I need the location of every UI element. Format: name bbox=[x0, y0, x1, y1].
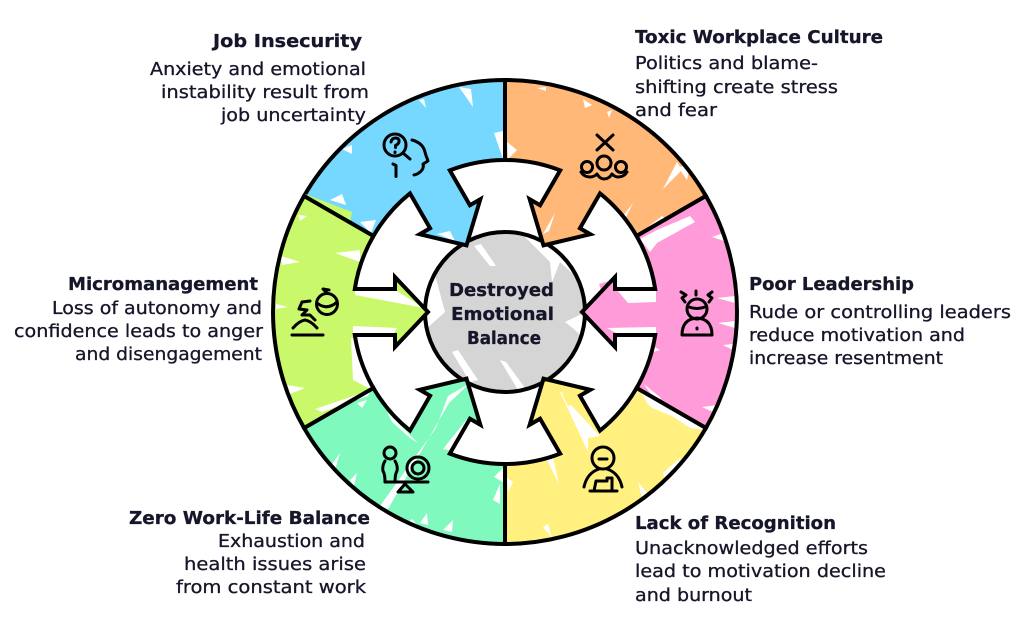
icon: head with question mark bbox=[384, 134, 428, 176]
centre label: Balance bbox=[467, 328, 541, 349]
text block: poor leadership: Poor Leadership bbox=[749, 274, 914, 295]
centre label: Emotional bbox=[451, 304, 554, 325]
centre circle bbox=[420, 230, 590, 395]
text block: micromanagement: and disengagement bbox=[75, 344, 262, 365]
text block: zero work-life balance: Exhaustion and bbox=[218, 531, 365, 552]
icon: person at laptop bbox=[584, 447, 622, 491]
text block: toxic workplace culture: Toxic Workplace Culture bbox=[635, 27, 883, 48]
text block: poor leadership: reduce motivation and bbox=[749, 325, 965, 346]
text block: poor leadership: Rude or controlling leaders bbox=[749, 302, 1011, 323]
text block: lack of recognition: Unacknowledged efforts bbox=[635, 538, 868, 559]
text block: lack of recognition: Lack of Recognition bbox=[635, 513, 836, 534]
text block: job insecurity bbox=[150, 31, 369, 126]
segment: zero work-life balance (green) bbox=[289, 321, 567, 571]
text block: zero work-life balance: Zero Work-Life Balance bbox=[129, 508, 370, 529]
icon: person balancing coin on scale bbox=[383, 447, 429, 492]
text block: job insecurity: Anxiety and emotional bbox=[150, 59, 366, 80]
icon: person under pressure bbox=[292, 289, 338, 335]
text block: toxic workplace culture: and fear bbox=[635, 100, 718, 121]
text block: micromanagement: Micromanagement bbox=[68, 274, 258, 295]
text block: lack of recognition bbox=[635, 513, 886, 606]
icon: stressed person bbox=[681, 291, 712, 335]
text block: zero work-life balance: from constant work bbox=[176, 577, 367, 598]
centre label: Destroyed bbox=[449, 280, 554, 301]
text block: job insecurity: instability result from bbox=[161, 82, 369, 103]
text block: poor leadership: increase resentment bbox=[749, 348, 943, 369]
text block: toxic workplace culture: Politics and blame- bbox=[635, 53, 818, 74]
segment: poor leadership (pink) bbox=[582, 196, 737, 428]
segment: toxic workplace culture (orange) bbox=[443, 53, 721, 303]
text block: job insecurity: job uncertainty bbox=[220, 105, 366, 126]
text block: zero work-life balance bbox=[129, 508, 370, 598]
text block: micromanagement bbox=[14, 274, 264, 365]
text block: toxic workplace culture bbox=[635, 27, 883, 121]
text block: lack of recognition: and burnout bbox=[635, 585, 752, 606]
segment: job insecurity (blue) bbox=[289, 53, 567, 303]
centre label bbox=[449, 280, 554, 349]
text block: toxic workplace culture: shifting create stress bbox=[635, 77, 838, 98]
text block: zero work-life balance: health issues arise bbox=[184, 554, 366, 575]
text block: micromanagement: confidence leads to anger bbox=[14, 321, 264, 342]
text block: micromanagement: Loss of autonomy and bbox=[52, 298, 262, 319]
segment: micromanagement (lime) bbox=[273, 194, 428, 428]
text block: lack of recognition: lead to motivation decline bbox=[635, 561, 886, 582]
text block: poor leadership bbox=[749, 274, 1011, 369]
text block: job insecurity: Job Insecurity bbox=[211, 31, 362, 52]
segment: lack of recognition (yellow) bbox=[443, 321, 721, 571]
icon: crossed group of people bbox=[581, 135, 627, 179]
